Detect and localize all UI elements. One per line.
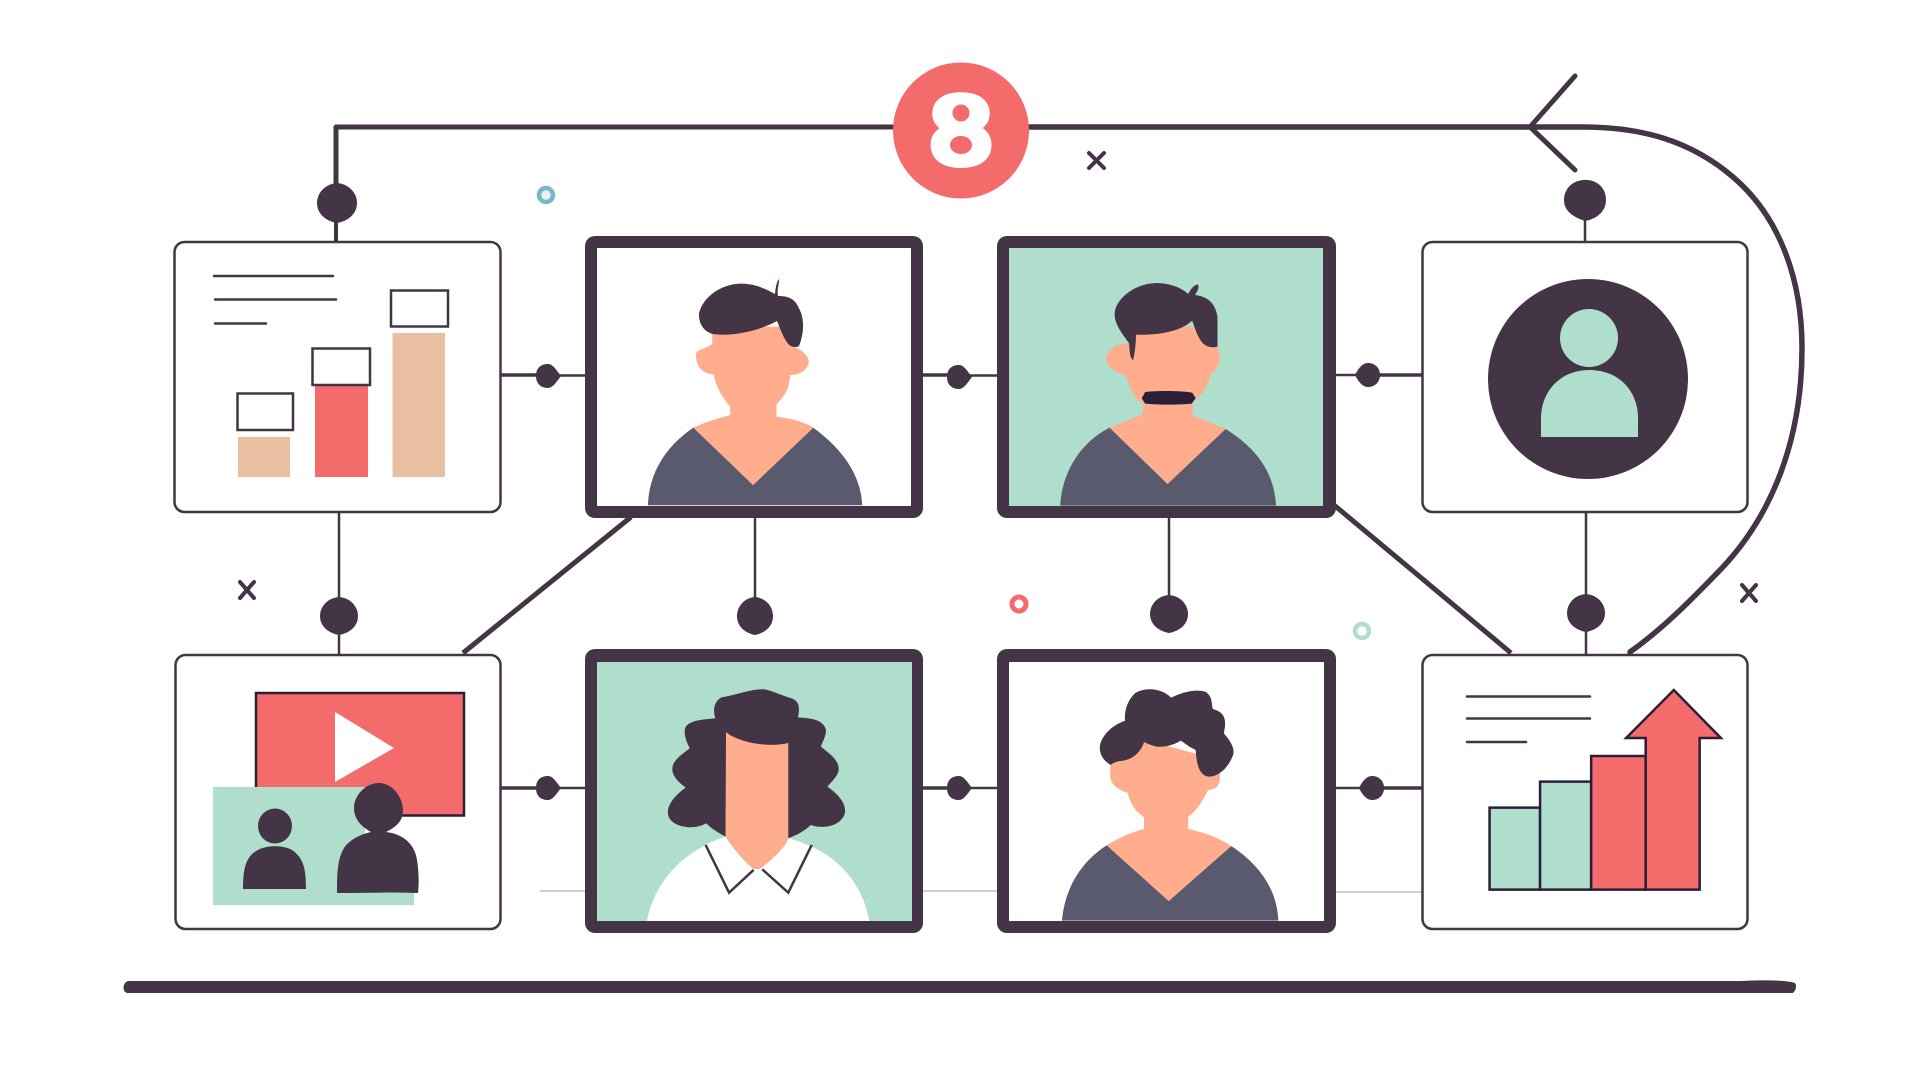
tall tan bar [392,333,445,477]
text lines [1467,696,1590,742]
man figure [1060,283,1276,506]
decorative rings and crosses [240,153,1756,638]
connector nodes [317,180,1606,800]
avatar circle [1488,279,1688,479]
top connector line with return arrow [336,76,1802,652]
avatar head [1560,309,1618,367]
panel: video with audience [176,655,500,929]
ground line [124,980,1796,993]
tan bar [238,437,290,477]
badge: number 8: 8 [932,77,990,184]
panel: woman portrait on mint [585,649,923,933]
audience figures [243,783,419,893]
panel: growth chart with arrow [1422,655,1748,929]
red bar [315,385,368,477]
panel: man portrait on white [585,236,923,518]
panel: bearded man portrait on mint [997,236,1336,518]
panel: user avatar [1422,242,1748,512]
panel: curly-haired man portrait on white [997,649,1336,933]
man figure [648,279,862,505]
woman figure [647,689,869,921]
outlined boxes [238,290,448,430]
rising bars [1490,808,1540,890]
man figure [1062,689,1278,921]
badge: number 8 [893,62,1029,198]
panel: bar chart with notes [174,242,500,512]
text lines [214,276,336,324]
avatar body [1541,370,1638,437]
faint background lines [540,891,1425,892]
rising arrow [1626,690,1721,890]
video screen [256,693,464,816]
connectors between panels [336,218,1586,788]
play triangle [335,712,394,782]
mint card [213,787,414,905]
